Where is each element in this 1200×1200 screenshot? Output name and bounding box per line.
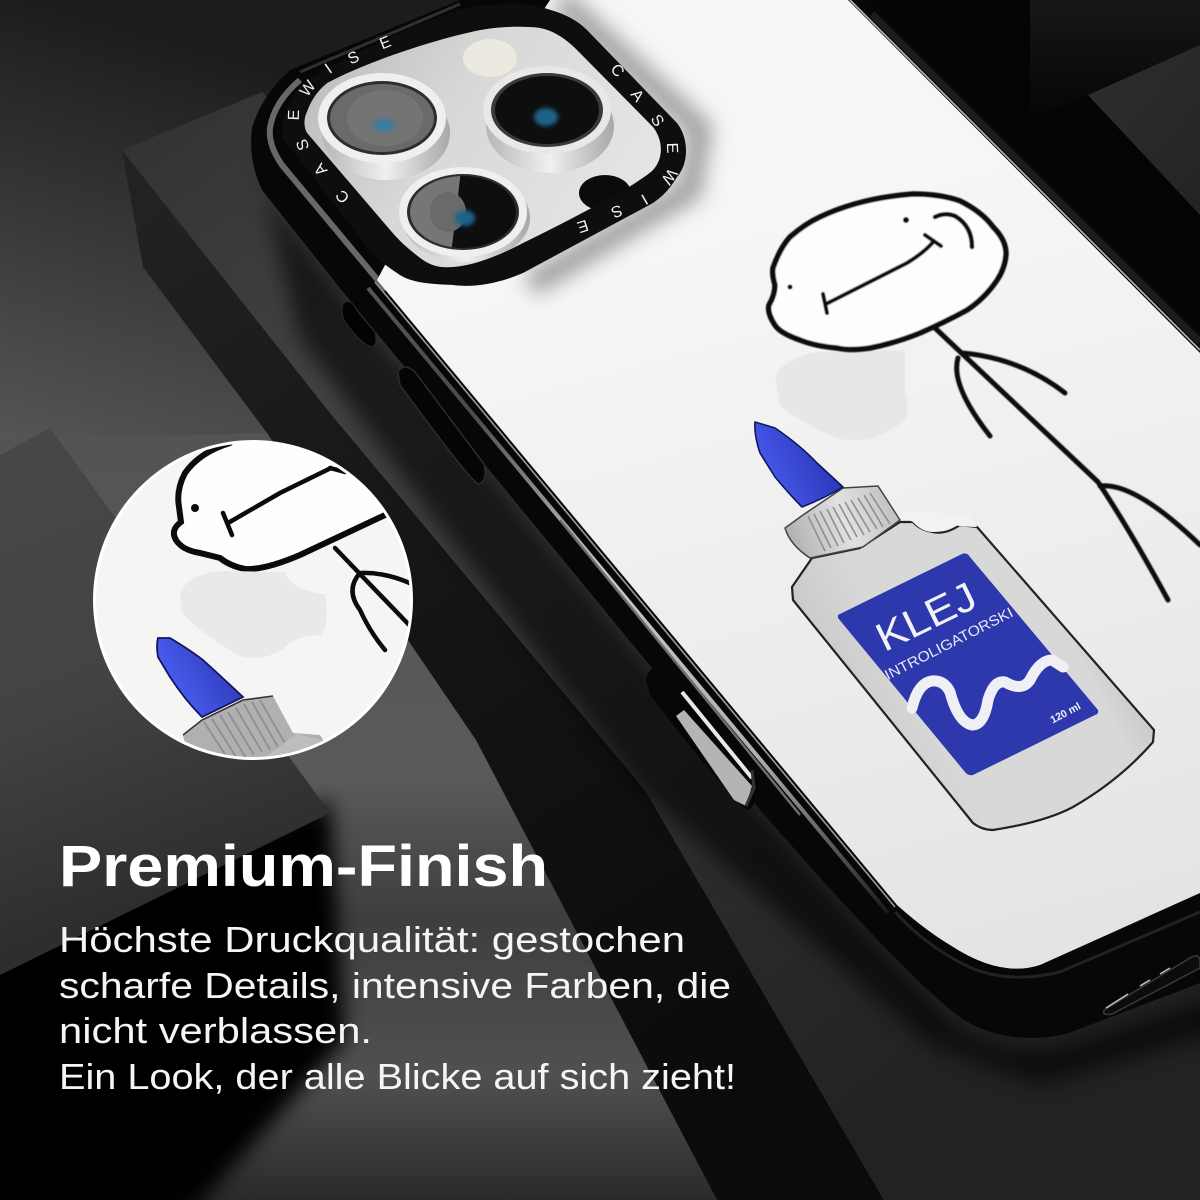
microphone hole [579, 175, 631, 211]
zoomed nozzle [157, 638, 243, 717]
eyes [788, 284, 792, 290]
CASEWISE lettering right: C [607, 61, 627, 81]
zoomed mouth [223, 468, 345, 535]
label KLEJ: KLEJ [869, 574, 984, 660]
label wave [912, 660, 1063, 725]
zoomed eye [191, 504, 199, 512]
lens top right [483, 66, 614, 173]
lens bottom [399, 167, 530, 262]
CASEWISE lettering right: I [638, 190, 650, 207]
flash [463, 39, 517, 77]
camera island [282, 4, 686, 286]
blue nozzle [755, 422, 843, 507]
CASEWISE lettering right: W [657, 165, 680, 188]
phone rim highlights [270, 0, 1200, 977]
grey smudge [775, 350, 908, 440]
label subtitle: INTROLIGATORSKI [882, 605, 1016, 684]
CASEWISE lettering right: A [627, 86, 647, 106]
camera ring [282, 4, 686, 286]
CASEWISE lettering left: C [333, 186, 353, 206]
stick figure [769, 194, 1200, 600]
CASEWISE lettering left: S [294, 137, 313, 152]
cap [785, 486, 900, 558]
power button [676, 692, 754, 806]
bottle body [792, 522, 1154, 830]
CASEWISE lettering right: E [663, 142, 680, 154]
CASEWISE lettering left: W [297, 77, 320, 100]
cheek line [935, 214, 972, 247]
CASEWISE lettering right: S [647, 112, 667, 130]
lens top left [318, 73, 450, 180]
bite mark cover [895, 510, 977, 532]
zoom detail circle [93, 440, 420, 765]
side switch [342, 301, 376, 347]
zoomed smudge [180, 571, 327, 658]
power button recess [646, 666, 760, 810]
head [769, 194, 1006, 350]
CASEWISE lettering right: S [609, 201, 624, 220]
CASEWISE lettering left: I [322, 61, 336, 77]
camera shadow on panel [530, 0, 700, 285]
body copy: Höchste Druckqualität: gestochen [59, 919, 685, 960]
charging port [1104, 956, 1200, 1014]
zoomed cap [183, 696, 324, 757]
CASEWISE lettering left: S [345, 48, 362, 68]
body copy: nicht verblassen. [59, 1010, 372, 1051]
CASEWISE lettering left: A [311, 159, 331, 179]
volume button [398, 367, 485, 484]
CASEWISE lettering left: E [286, 109, 303, 121]
CASEWISE lettering left: E [377, 34, 394, 53]
camera window [304, 27, 661, 267]
body and limbs [935, 328, 1200, 600]
CASEWISE lettering right [575, 61, 680, 235]
heading: Premium-Finish [59, 834, 548, 899]
CASEWISE lettering left [286, 34, 394, 206]
glue bottle [755, 422, 1154, 830]
body copy: scharfe Details, intensive Farben, die [59, 965, 731, 1006]
smile [823, 235, 941, 313]
label [838, 553, 1098, 775]
phone case body [251, 0, 1200, 1085]
white printed back panel [377, 0, 1200, 969]
body copy: Ein Look, der alle Blicke auf sich zieht! [59, 1056, 736, 1097]
label volume: 120 ml [1048, 700, 1083, 726]
zoomed limbs [335, 548, 412, 650]
zoomed head [177, 443, 383, 566]
CASEWISE lettering right: E [575, 216, 590, 235]
body copy [59, 919, 736, 1097]
